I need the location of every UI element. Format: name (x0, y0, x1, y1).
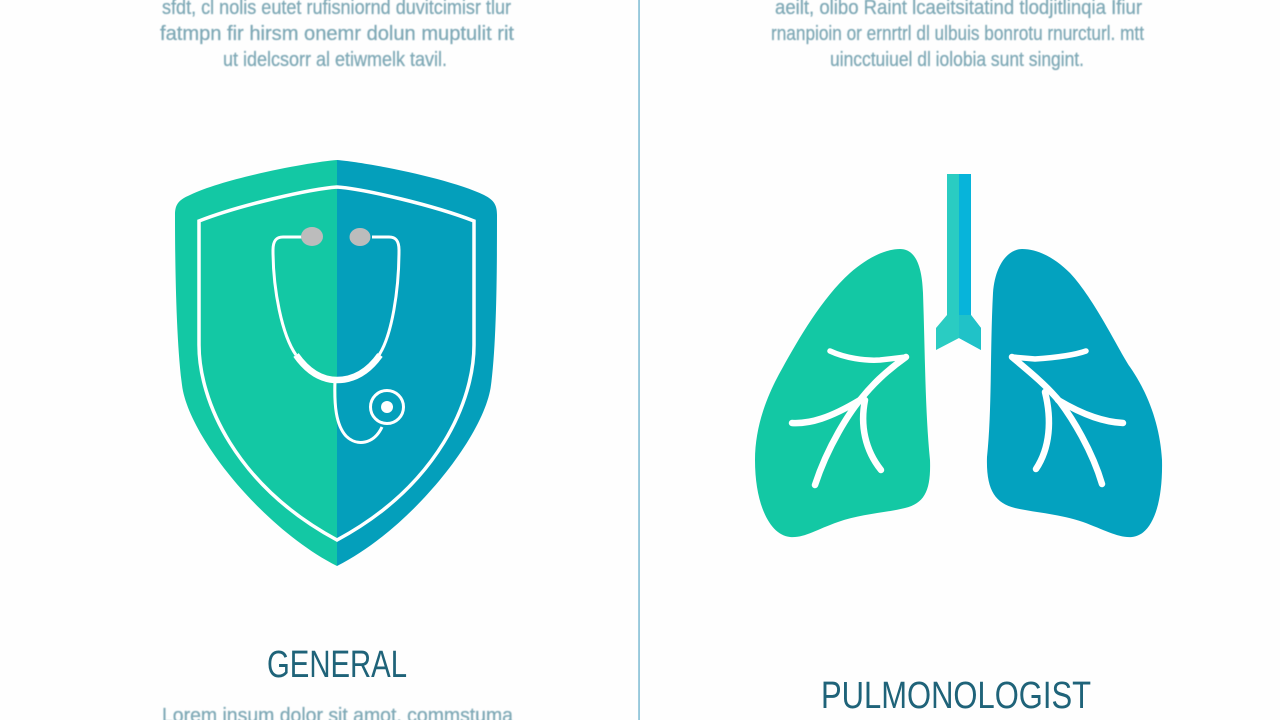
right lung bronchi (1012, 351, 1123, 484)
text block: left intro (160, 0, 514, 71)
icon: shield with stethoscope (175, 160, 497, 566)
heading: GENERAL: GENERAL (267, 644, 407, 686)
chest piece centre (381, 401, 393, 413)
text block: left intro: fatmpn fir hirsm onemr dolun muptulit rit (160, 23, 514, 45)
trachea left half (936, 174, 959, 350)
text block: left intro: ut idelcsorr al etiwmelk tavil. (223, 49, 447, 71)
text block: right intro (771, 0, 1144, 71)
shield inner outline (199, 187, 474, 540)
stethoscope yoke (296, 355, 380, 380)
column divider (638, 0, 640, 720)
text block: right intro: uincctuiuel dl iolobia sunt singint. (830, 49, 1084, 71)
text block: right intro: rnanpioin or ernrtrl dl ulbuis bonrotu rnurcturl. mtt (771, 23, 1144, 45)
right earpiece (350, 228, 370, 246)
trachea right half (959, 174, 981, 350)
stethoscope lower tube (335, 380, 382, 442)
right lung (987, 249, 1162, 537)
heading: PULMONOLOGIST: PULMONOLOGIST (821, 675, 1091, 717)
trachea flare shade (959, 315, 981, 350)
stethoscope tubing (273, 237, 399, 355)
left earpiece (301, 227, 323, 246)
icon: lungs (755, 174, 1162, 537)
left lung (755, 249, 930, 537)
left lung bronchi (792, 351, 906, 485)
shield right half (337, 160, 497, 566)
stethoscope chest piece (370, 390, 404, 424)
shield left half (175, 160, 337, 566)
